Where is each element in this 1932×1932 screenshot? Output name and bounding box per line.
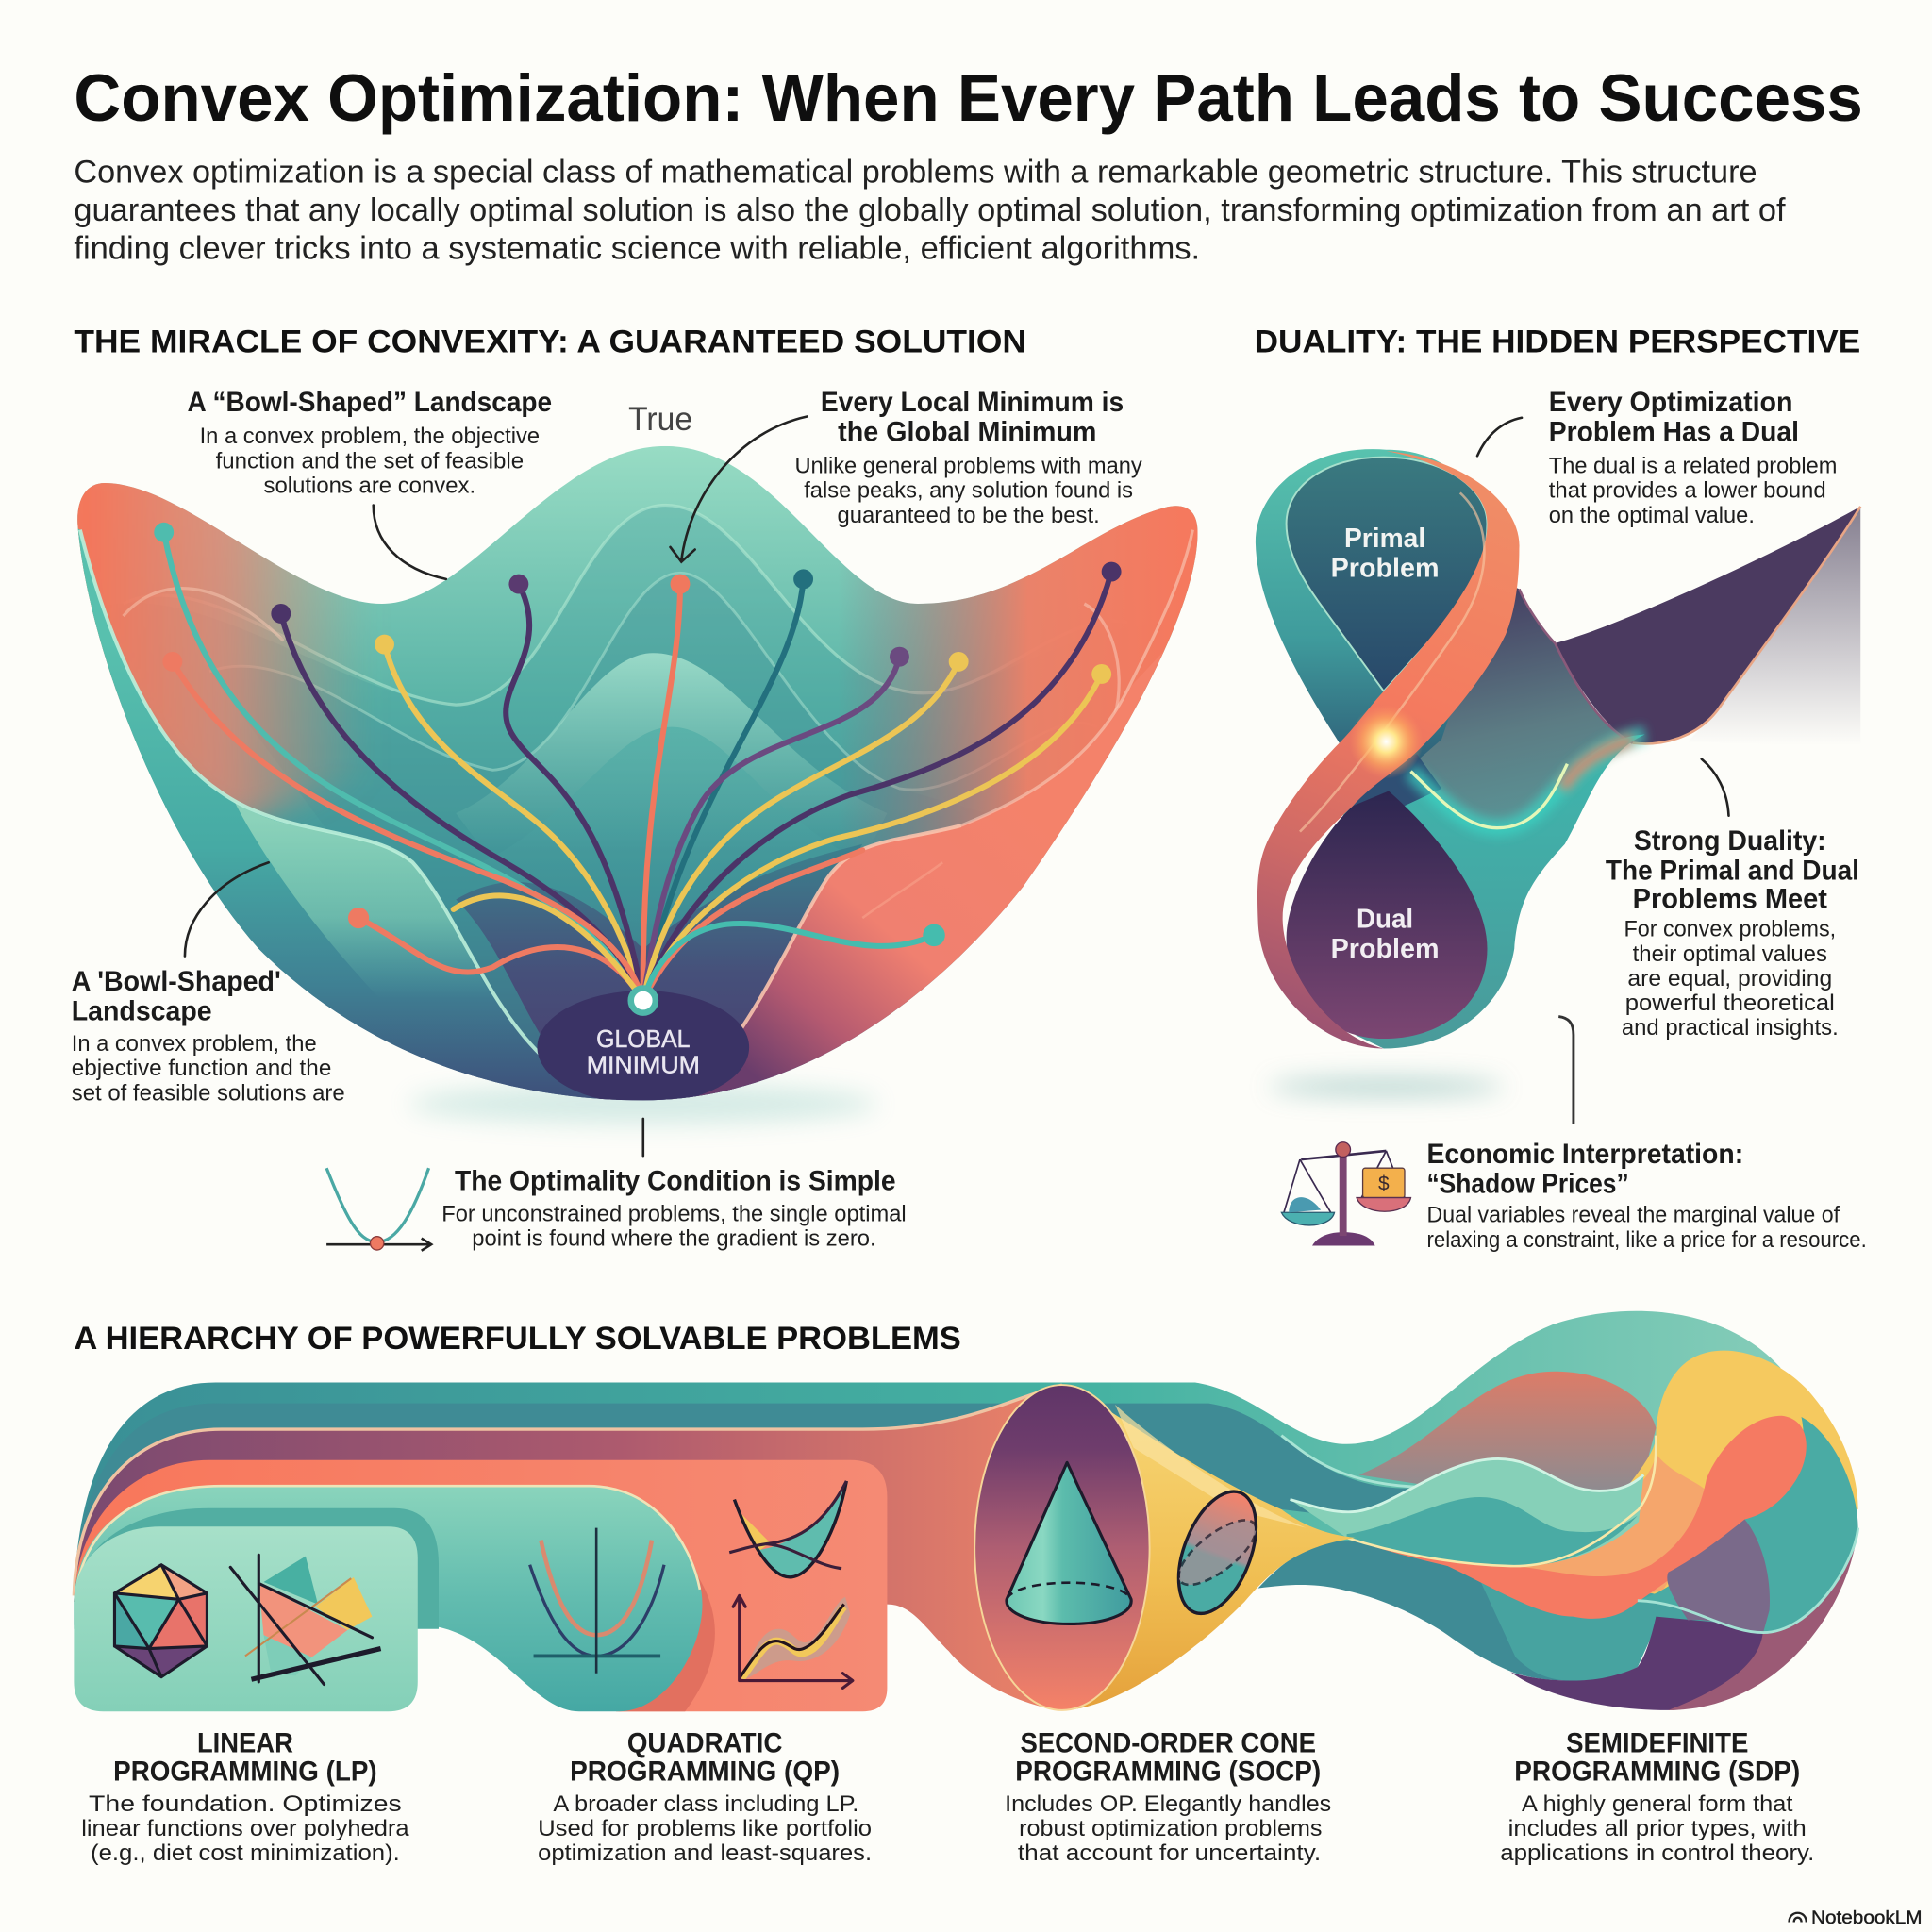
hierarchy ribbon <box>74 1311 1858 1711</box>
label: linear programming <box>81 1727 409 1866</box>
cross-section ellipse icon <box>1163 1481 1272 1624</box>
intro paragraph <box>74 154 1786 266</box>
callout: local minimum: false peaks, any solution found is <box>804 478 1133 504</box>
callout: local minimum <box>794 387 1143 528</box>
panel: linear programming <box>74 1526 418 1711</box>
label: dual problem: Problem <box>1331 934 1440 964</box>
callout: local minimum: Every Local Minimum is <box>821 387 1124 418</box>
heading: duality: DUALITY: THE HIDDEN PERSPECTIVE <box>1255 325 1860 360</box>
cone icon <box>1007 1462 1131 1624</box>
label: semidefinite programming: PROGRAMMING (SDP) <box>1514 1756 1800 1787</box>
label: quadratic programming <box>538 1727 872 1866</box>
callout: shadow prices: relaxing a constraint, like a price for a resource. <box>1426 1227 1867 1253</box>
label: primal problem <box>1331 524 1440 583</box>
arrow: bowl callout leader <box>374 506 446 579</box>
icon: parabola with gradient zero <box>326 1168 431 1251</box>
callout: strong duality: powerful theoretical <box>1625 991 1835 1016</box>
label: linear programming: linear functions over polyhedra <box>81 1816 409 1841</box>
arrow: strong duality leader <box>1702 759 1728 816</box>
callout: strong duality: Problems Meet <box>1633 884 1827 915</box>
callout: every problem has a dual: that provides a lower bound <box>1549 478 1826 504</box>
callout: bowl-shaped landscape left: ebjective function and the <box>72 1056 331 1081</box>
NotebookLM watermark: NotebookLM <box>1811 1907 1923 1928</box>
label: second-order cone programming: PROGRAMMING (SOCP) <box>1015 1756 1321 1787</box>
callout: every problem has a dual: Every Optimization <box>1549 387 1792 418</box>
label: semidefinite programming: includes all prior types, with <box>1508 1816 1807 1841</box>
callout: optimality condition <box>441 1166 907 1251</box>
label: second-order cone programming: robust optimization problems <box>1019 1816 1322 1841</box>
icon: balance scale: $ <box>1378 1174 1390 1195</box>
label: second-order cone programming: that account for uncertainty. <box>1018 1840 1321 1866</box>
callout: shadow prices <box>1426 1139 1867 1253</box>
bowl illustration <box>49 431 1220 1109</box>
icon: growth chart <box>733 1595 853 1688</box>
label: semidefinite programming: applications in control theory. <box>1500 1840 1814 1866</box>
arrow: dual leader <box>1477 418 1522 456</box>
descent paths <box>154 523 1122 1001</box>
callout: bowl-shaped landscape top: solutions are convex. <box>264 473 475 498</box>
callout: every problem has a dual: The dual is a related problem <box>1549 454 1837 479</box>
label: quadratic programming: Used for problems like portfolio <box>538 1816 872 1841</box>
callout: strong duality: their optimal values <box>1633 941 1827 967</box>
callout: local minimum: the Global Minimum <box>838 417 1096 448</box>
label: quadratic programming: PROGRAMMING (QP) <box>570 1756 840 1787</box>
callout: bowl-shaped landscape left: A 'Bowl-Shaped' <box>72 966 281 997</box>
label: dual problem: Dual <box>1357 905 1413 935</box>
bowl shadow <box>409 1084 877 1124</box>
callout: shadow prices: “Shadow Prices” <box>1426 1168 1629 1199</box>
heading: miracle of convexity: THE MIRACLE OF CONVEXITY: A GUARANTEED SOLUTION <box>74 325 1026 360</box>
global minimum marker <box>631 989 656 1013</box>
label: semidefinite programming: SEMIDEFINITE <box>1566 1727 1748 1758</box>
global minimum label: GLOBAL <box>596 1024 690 1053</box>
intro paragraph: finding clever tricks into a systematic science with reliable, efficient algorithms. <box>74 230 1200 266</box>
callout: optimality condition: point is found where the gradient is zero. <box>472 1225 876 1251</box>
label: quadratic programming: QUADRATIC <box>627 1727 782 1758</box>
intro paragraph: Convex optimization is a special class of mathematical problems with a remarkable geometric structure. This structure <box>74 154 1757 190</box>
label: quadratic programming: A broader class including LP. <box>553 1791 858 1817</box>
icon: surface curves <box>729 1481 846 1577</box>
heading: hierarchy: A HIERARCHY OF POWERFULLY SOLVABLE PROBLEMS <box>74 1321 961 1357</box>
intro paragraph: guarantees that any locally optimal solution is also the globally optimal solution, transforming optimization from an art of <box>74 192 1786 228</box>
arrow: local minimum leader <box>671 416 808 562</box>
icon: polyhedron <box>114 1565 207 1677</box>
callout: optimality condition: The Optimality Condition is Simple <box>455 1166 896 1197</box>
callout: bowl-shaped landscape top: In a convex problem, the objective <box>200 424 540 449</box>
callout: bowl-shaped landscape left: set of feasible solutions are <box>72 1080 345 1106</box>
callout: bowl-shaped landscape left: Landscape <box>72 995 212 1026</box>
callout: strong duality: are equal, providing <box>1627 966 1832 991</box>
label: dual problem <box>1331 905 1440 964</box>
title: Convex Optimization: When Every Path Leads to Success <box>74 60 1863 135</box>
label: primal problem: Problem <box>1331 553 1440 583</box>
label: semidefinite programming <box>1500 1727 1814 1866</box>
icon: quadratic parabolas <box>530 1528 664 1674</box>
label: linear programming: LINEAR <box>197 1727 293 1758</box>
label: True: True <box>628 401 692 438</box>
label: second-order cone programming <box>1005 1727 1331 1866</box>
callout: every problem has a dual: Problem Has a Dual <box>1549 417 1799 448</box>
callout: shadow prices: Economic Interpretation: <box>1426 1139 1743 1170</box>
figure-8 shadow <box>1269 1078 1503 1095</box>
label: quadratic programming: optimization and least-squares. <box>538 1840 872 1866</box>
callout: strong duality: For convex problems, <box>1624 917 1836 942</box>
callout: strong duality: Strong Duality: <box>1634 825 1826 857</box>
callout: bowl-shaped landscape left: In a convex problem, the <box>72 1031 317 1057</box>
arrow: economic leader <box>1558 1017 1574 1124</box>
callout: strong duality: and practical insights. <box>1622 1015 1839 1041</box>
global minimum label: MINIMUM <box>587 1051 700 1079</box>
callout: strong duality <box>1606 825 1859 1041</box>
label: semidefinite programming: A highly general form that <box>1522 1791 1793 1817</box>
label: second-order cone programming: SECOND-ORDER CONE <box>1020 1727 1316 1758</box>
label: linear programming: (e.g., diet cost minimization). <box>91 1840 400 1866</box>
global minimum label <box>587 1024 700 1079</box>
label: primal problem: Primal <box>1344 524 1425 554</box>
callout: bowl-shaped landscape top: A “Bowl-Shaped” Landscape <box>188 387 552 418</box>
label: linear programming: PROGRAMMING (LP) <box>113 1756 377 1787</box>
label: linear programming: The foundation. Optimizes <box>89 1791 402 1817</box>
callout: local minimum: Unlike general problems with many <box>794 454 1143 479</box>
icon: linear constraints <box>230 1555 381 1684</box>
label: second-order cone programming: Includes OP. Elegantly handles <box>1005 1791 1331 1817</box>
arrow: left bowl leader <box>185 862 269 957</box>
callout: optimality condition: For unconstrained problems, the single optimal <box>441 1201 907 1226</box>
callout: shadow prices: Dual variables reveal the marginal value of <box>1426 1203 1840 1228</box>
duality figure-8 <box>1256 449 1860 1049</box>
callout: every problem has a dual <box>1549 387 1837 528</box>
arrow: optimality leader <box>642 1119 644 1156</box>
callout: bowl-shaped landscape left <box>72 966 345 1106</box>
icon: balance scale <box>1281 1142 1411 1245</box>
callout: bowl-shaped landscape top <box>188 387 552 498</box>
callout: bowl-shaped landscape top: function and the set of feasible <box>216 448 524 474</box>
callout: strong duality: The Primal and Dual <box>1606 856 1859 887</box>
callout: every problem has a dual: on the optimal value. <box>1549 503 1755 528</box>
callout: local minimum: guaranteed to be the best. <box>838 503 1100 528</box>
